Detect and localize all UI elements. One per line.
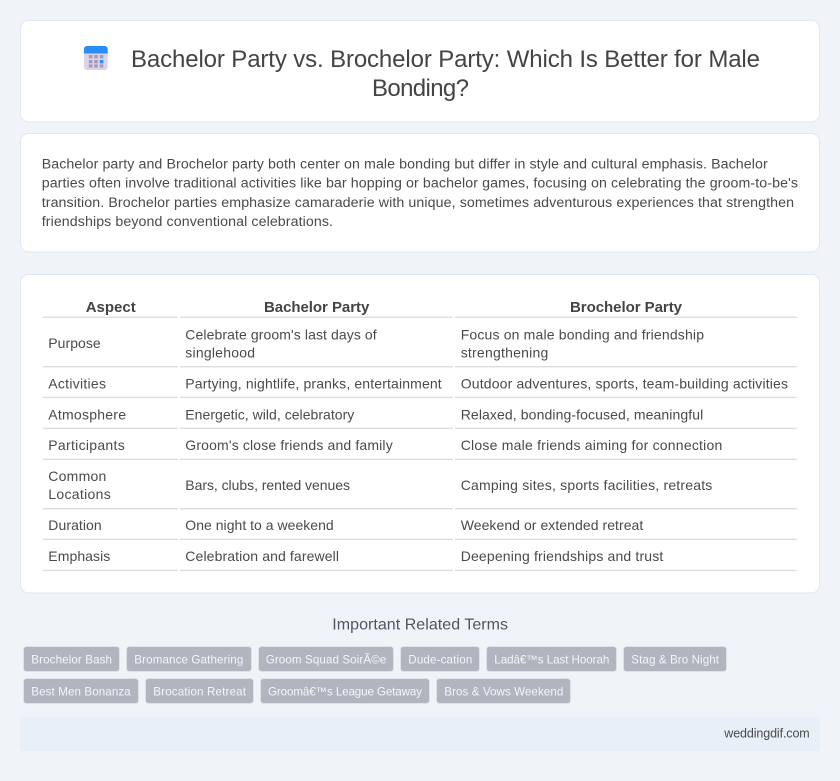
row: activities (48, 375, 788, 391)
row: atmosphere: Atmosphere (48, 406, 126, 422)
tag: Stag & Bro Night (624, 646, 726, 672)
tag: Brochelor Bash: Brochelor Bash (31, 653, 112, 666)
row: participants: Groom's close friends and family (185, 437, 393, 453)
tag: Stag & Bro Night: Stag & Bro Night (631, 653, 720, 666)
table header row (86, 299, 683, 316)
tag: Bromance Gathering (126, 646, 252, 672)
row: emphasis: Deepening friendships and trust (461, 548, 663, 564)
row: common locations: Bars, clubs, rented venues (185, 477, 350, 493)
row: common locations: Locations (48, 486, 111, 502)
title (131, 46, 760, 102)
tag: Brochelor Bash (24, 646, 120, 672)
row: participants: Participants (48, 437, 125, 453)
tag: Best Men Bonanza (24, 678, 138, 704)
tag: Brocation Retreat (146, 678, 254, 704)
tag: Bros & Vows Weekend (436, 678, 570, 704)
row: atmosphere: Energetic, wild, celebratory (185, 406, 354, 422)
row: common locations: Camping sites, sports facilities, retreats (461, 477, 712, 493)
table header row: Brochelor Party (570, 299, 683, 316)
tag: Best Men Bonanza: Best Men Bonanza (31, 685, 131, 698)
row: duration: Duration (48, 517, 102, 533)
row: purpose: strengthening (461, 344, 548, 360)
text block: introduction paragraph (42, 156, 798, 230)
tag: Lad's Last Hoorah: Ladâ€™s Last Hoorah (494, 653, 609, 666)
row: duration: One night to a weekend (185, 517, 334, 533)
row: atmosphere (48, 406, 703, 422)
row: activities: Activities (48, 375, 106, 391)
row: purpose: Focus on male bonding and friendship (461, 326, 704, 342)
row: emphasis: Celebration and farewell (185, 548, 339, 564)
heading: important related terms: Important Related Terms (332, 616, 508, 633)
title: Bonding? (372, 75, 469, 102)
row: common locations (48, 468, 712, 502)
text block: introduction paragraph: parties often involve traditional activities like bar hopping or bachelor games, focusing on celebrating the groom-to-be's (42, 176, 798, 192)
panel: introduction (20, 134, 820, 252)
tag: Bromance Gathering: Bromance Gathering (134, 653, 243, 666)
row: duration (48, 517, 643, 533)
tag: Lad's Last Hoorah (486, 646, 616, 672)
text block: introduction paragraph: friendships beyond conventional celebrations. (42, 214, 333, 230)
title: Bachelor Party vs. Brochelor Party: Which Is Better for Male (131, 46, 760, 73)
tag group: related terms (24, 646, 726, 704)
row: emphasis (48, 548, 663, 564)
row: purpose: Celebrate groom's last days of (185, 326, 377, 342)
text block: introduction paragraph: Bachelor party and Brochelor party both center on male bonding but differ in style and cultural emphasis. Bachelor (42, 156, 768, 172)
row: purpose: singlehood (185, 344, 255, 360)
tag: Groom's League Getaway (260, 678, 430, 704)
tag: Groom Squad Soiree: Groom Squad SoirÃ©e (266, 653, 386, 666)
tag: Dude-cation: Dude-cation (408, 653, 472, 666)
row: emphasis: Emphasis (48, 548, 110, 564)
row: atmosphere: Relaxed, bonding-focused, meaningful (461, 406, 703, 422)
row: participants: Close male friends aiming for connection (461, 437, 722, 453)
row: common locations: Common (48, 468, 106, 484)
row: participants (48, 437, 722, 453)
icon: calendar (84, 46, 108, 70)
table header row: Bachelor Party (264, 299, 370, 316)
panel: title card (20, 20, 820, 122)
row: purpose: Purpose (48, 335, 101, 351)
panel: comparison table (20, 274, 820, 593)
tag: Brocation Retreat: Brocation Retreat (153, 685, 247, 698)
row: activities: Partying, nightlife, pranks, entertainment (185, 375, 442, 391)
row: purpose (48, 326, 704, 360)
tag: Groom's League Getaway: Groomâ€™s League Getaway (268, 685, 422, 698)
row: duration: Weekend or extended retreat (461, 517, 643, 533)
row: activities: Outdoor adventures, sports, team-building activities (461, 375, 788, 391)
footer bar (20, 717, 820, 751)
tag: Dude-cation (400, 646, 480, 672)
tag: Bros & Vows Weekend: Bros & Vows Weekend (444, 685, 563, 698)
table header row: Aspect (86, 299, 136, 316)
tag: Groom Squad Soiree (258, 646, 394, 672)
text block: introduction paragraph: transition. Brochelor parties emphasize camaraderie with unique, sometimes adventurous experiences that strengthen (42, 195, 794, 211)
footer source text: weddingdif.com (723, 727, 810, 741)
